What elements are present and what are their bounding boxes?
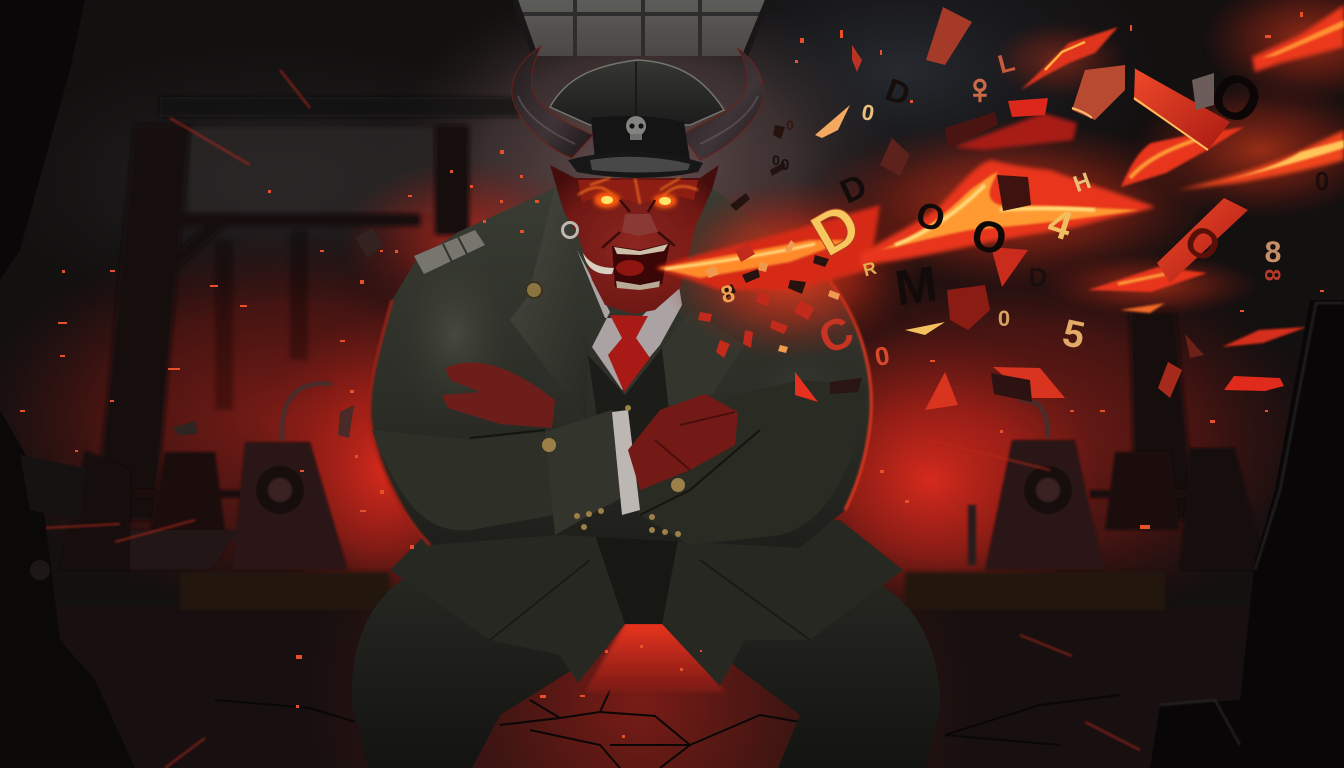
machines left bbox=[60, 383, 348, 570]
flying letter fragments: O bbox=[1176, 215, 1230, 272]
shirt bbox=[577, 250, 682, 390]
machines right bbox=[968, 400, 1265, 570]
tie bbox=[608, 315, 650, 392]
pin bbox=[526, 282, 542, 298]
flying letter fragments: L bbox=[995, 46, 1018, 80]
flying letter fragments: O bbox=[1198, 56, 1274, 140]
flying letter fragments: R bbox=[861, 258, 879, 280]
streak C bbox=[1121, 127, 1244, 187]
flying letter fragments: M bbox=[892, 255, 941, 317]
flying letter fragments: 0 bbox=[872, 340, 892, 372]
glyphs: 5 bbox=[1059, 312, 1088, 358]
flying letter fragments: 4 bbox=[1043, 201, 1078, 250]
shoulder highlights bbox=[395, 245, 515, 425]
cuff bbox=[612, 410, 640, 515]
upper dim streak bbox=[954, 113, 1077, 150]
eyes bbox=[594, 192, 620, 208]
hands bbox=[442, 363, 738, 490]
skylight bbox=[515, 0, 768, 56]
coat skirts bbox=[390, 520, 903, 686]
glow along stream bbox=[660, 180, 920, 360]
columns and beams bbox=[95, 97, 1195, 520]
nose and creases bbox=[622, 214, 658, 236]
flying letter fragments: D bbox=[834, 167, 873, 212]
flying letter fragments: H bbox=[1070, 167, 1094, 197]
crown of hat bbox=[550, 60, 724, 125]
flying letter fragments: 0 bbox=[786, 117, 794, 133]
lapels bbox=[510, 188, 590, 420]
horns bbox=[512, 46, 764, 160]
floor cracks bbox=[215, 690, 1120, 768]
flying letter fragments: O bbox=[967, 210, 1011, 265]
flying letter fragments: 8 bbox=[718, 280, 738, 309]
flying letter fragments: O bbox=[912, 193, 949, 240]
epaulette bbox=[414, 230, 485, 274]
shoulder rubble bbox=[698, 244, 814, 358]
head bbox=[550, 165, 719, 314]
back wall haze bbox=[0, 40, 580, 320]
mouth bbox=[612, 243, 670, 290]
breath from mouth bbox=[655, 205, 880, 290]
flying letter fragments: 0 bbox=[1315, 166, 1329, 196]
flying letter fragments: C bbox=[811, 307, 861, 364]
flying letter fragments: D bbox=[881, 71, 915, 113]
figure: demon officer bbox=[352, 46, 940, 768]
earring bbox=[562, 222, 578, 238]
flying letter fragments: 0 bbox=[860, 99, 876, 126]
torso and shoulders bbox=[370, 188, 871, 548]
flying letter fragments: 0 bbox=[998, 306, 1010, 331]
flying letter fragments: 0 bbox=[772, 152, 780, 168]
rim light bbox=[370, 300, 430, 545]
forearm right bbox=[620, 380, 868, 545]
skull badge bbox=[626, 116, 646, 140]
legs bbox=[352, 560, 940, 768]
streak G bbox=[1088, 267, 1207, 292]
flying letter fragments bbox=[172, 7, 1329, 438]
streak H bbox=[1222, 327, 1307, 347]
hat bbox=[568, 62, 703, 178]
floor bbox=[0, 606, 1344, 768]
streak F bbox=[1021, 27, 1118, 90]
flying letter fragments: D bbox=[800, 190, 871, 269]
main streak bbox=[860, 160, 1155, 265]
tusk bbox=[583, 253, 614, 274]
flying letter fragments: ♀ bbox=[964, 65, 996, 112]
slabs bbox=[1134, 68, 1230, 150]
flying letter fragments: 8 bbox=[1260, 269, 1285, 281]
red dust beside the head bbox=[340, 160, 600, 320]
fire stream bbox=[655, 0, 1344, 360]
flying letter fragments: 8 bbox=[1265, 236, 1281, 269]
flying letter fragments: 0 bbox=[781, 157, 790, 174]
streak D bbox=[1177, 130, 1344, 190]
red glow under coat bbox=[585, 622, 725, 692]
coat buttons bbox=[542, 405, 685, 537]
flying letter fragments: D bbox=[1029, 262, 1047, 292]
vest bbox=[588, 348, 670, 470]
streak E top right bbox=[1252, 5, 1344, 72]
forearm left bbox=[372, 410, 625, 535]
